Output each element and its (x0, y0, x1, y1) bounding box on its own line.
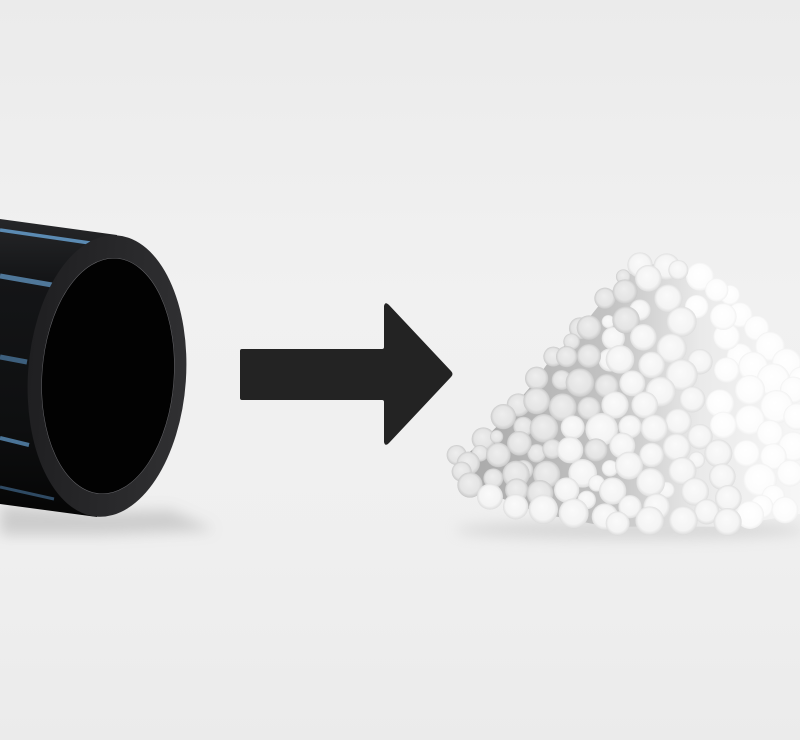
blue stripes (0, 230, 90, 499)
pipe bore (34, 254, 182, 498)
arrow (240, 303, 452, 445)
pipe outer ring (18, 230, 196, 522)
pile shadow (455, 521, 800, 539)
pipe floor shadow (0, 505, 215, 535)
pellet pile (447, 252, 800, 539)
pellets (447, 252, 800, 536)
pipe (0, 219, 215, 535)
pipe body (0, 219, 117, 517)
pile mass (470, 264, 770, 526)
